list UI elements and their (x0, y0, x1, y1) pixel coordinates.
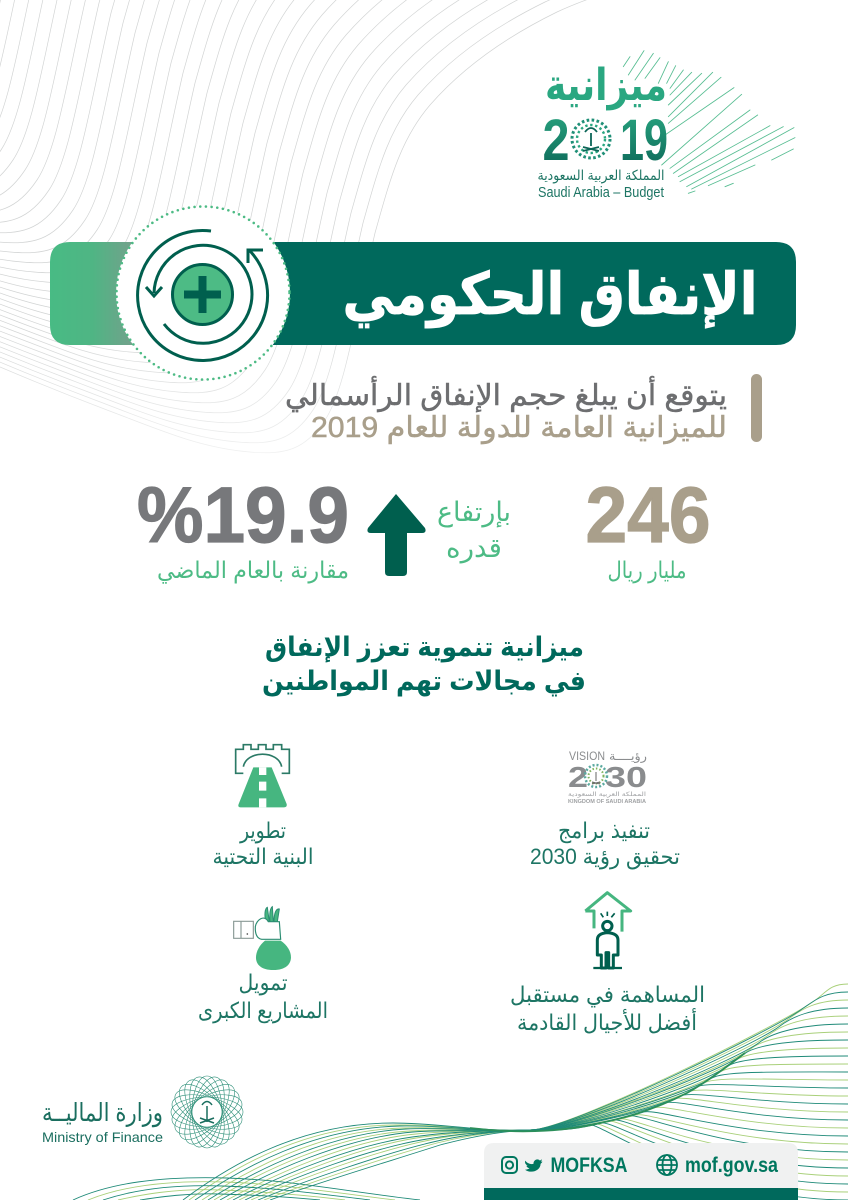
card background (484, 1143, 798, 1200)
icon: vision 2030 logo: KINGDOM OF SAUDI ARABIA (568, 799, 646, 805)
logo: year digits 19: 19 (620, 108, 668, 173)
section heading (262, 632, 586, 697)
stat value 19.9%: %19.9 (137, 470, 349, 559)
logo: year digit 2: 2 (542, 108, 570, 173)
logo: star emblem (572, 120, 610, 158)
handle MOFKSA: MOFKSA (550, 1154, 628, 1177)
icon: twitter (525, 1159, 543, 1172)
footer contact card (484, 1143, 798, 1200)
item: vision 2030 (530, 749, 680, 870)
banner: dark body (270, 242, 796, 345)
background: grey wave lines (0, 0, 848, 453)
future label: المساهمة في مستقبل (510, 982, 705, 1008)
stat comparison: مقارنة بالعام الماضي (157, 557, 349, 584)
title text: الإنفاق الحكومي (342, 262, 758, 329)
item: vision 2030: تحقيق رؤية 2030 (530, 844, 680, 870)
icon: cycle with plus in dotted circle (116, 206, 290, 380)
rise label: قدره (446, 533, 502, 564)
logo: map of diagonal lines (623, 51, 795, 193)
subtitle line 2: للميزانية العامة للدولة للعام 2019 (311, 412, 727, 444)
item: future generations: أفضل للأجيال القادمة (517, 1008, 697, 1035)
stat: 246 billion riyals (586, 470, 710, 584)
section heading: في مجالات تهم المواطنين (262, 666, 586, 697)
icon: vision 2030 logo: 30 (605, 762, 647, 794)
item: infrastructure: البنية التحتية (212, 844, 314, 869)
item: future generations (510, 893, 705, 1035)
icon: globe (657, 1155, 677, 1175)
logo: word budget: ميزانية (545, 61, 667, 111)
banner: green left end (50, 242, 135, 345)
rise label (437, 497, 511, 564)
icon: vision 2030 logo: VISION (569, 749, 605, 763)
icon: vision 2030 logo: 2 (568, 762, 588, 794)
icon: up arrow (367, 494, 426, 576)
stat unit: مليار ريال (608, 557, 686, 584)
icon: hand holding money bag (234, 907, 291, 970)
infrastructure label: تطوير (239, 818, 286, 843)
card bottom band (484, 1188, 798, 1200)
ministry Arabic name: وزارة الماليــة (42, 1099, 163, 1128)
stat value 246: 246 (586, 470, 710, 559)
projects label: تمويل (238, 970, 288, 995)
item: major projects (198, 907, 328, 1023)
icon: instagram (502, 1157, 517, 1173)
item: infrastructure (212, 745, 314, 869)
stat: 19.9 percent (137, 470, 349, 584)
item: major projects: المشاريع الكبرى (198, 998, 328, 1023)
subtitle accent bar (751, 374, 762, 442)
background: green wave lines at bottom (73, 984, 848, 1200)
ministry emblem (168, 1073, 246, 1151)
section heading: ميزانية تنموية تعزز الإنفاق (265, 632, 584, 663)
icon: road through gate (236, 745, 289, 807)
title banner (50, 206, 796, 380)
subtitle line 1: يتوقع أن يبلغ حجم الإنفاق الرأسمالي (285, 375, 727, 413)
vision label: تنفيذ برامج (558, 818, 650, 843)
subtitle block (285, 374, 762, 444)
website: mof.gov.sa (685, 1154, 778, 1177)
icon: vision 2030 logo: رؤيــــة (609, 749, 647, 764)
icon: vision 2030 logo: المملكة العربية السعودية (568, 791, 646, 798)
logo: Arabic caption: المملكة العربية السعودية (538, 167, 664, 184)
ministry English name: Ministry of Finance (42, 1129, 163, 1145)
logo: English caption: Saudi Arabia – Budget (538, 184, 665, 201)
budget 2019 logo (538, 51, 795, 201)
icon: vision 2030 logo (568, 749, 647, 805)
icon: person under house arrow (585, 893, 631, 968)
ministry of finance logo (42, 1073, 246, 1151)
rise label: بإرتفاع (437, 497, 511, 528)
